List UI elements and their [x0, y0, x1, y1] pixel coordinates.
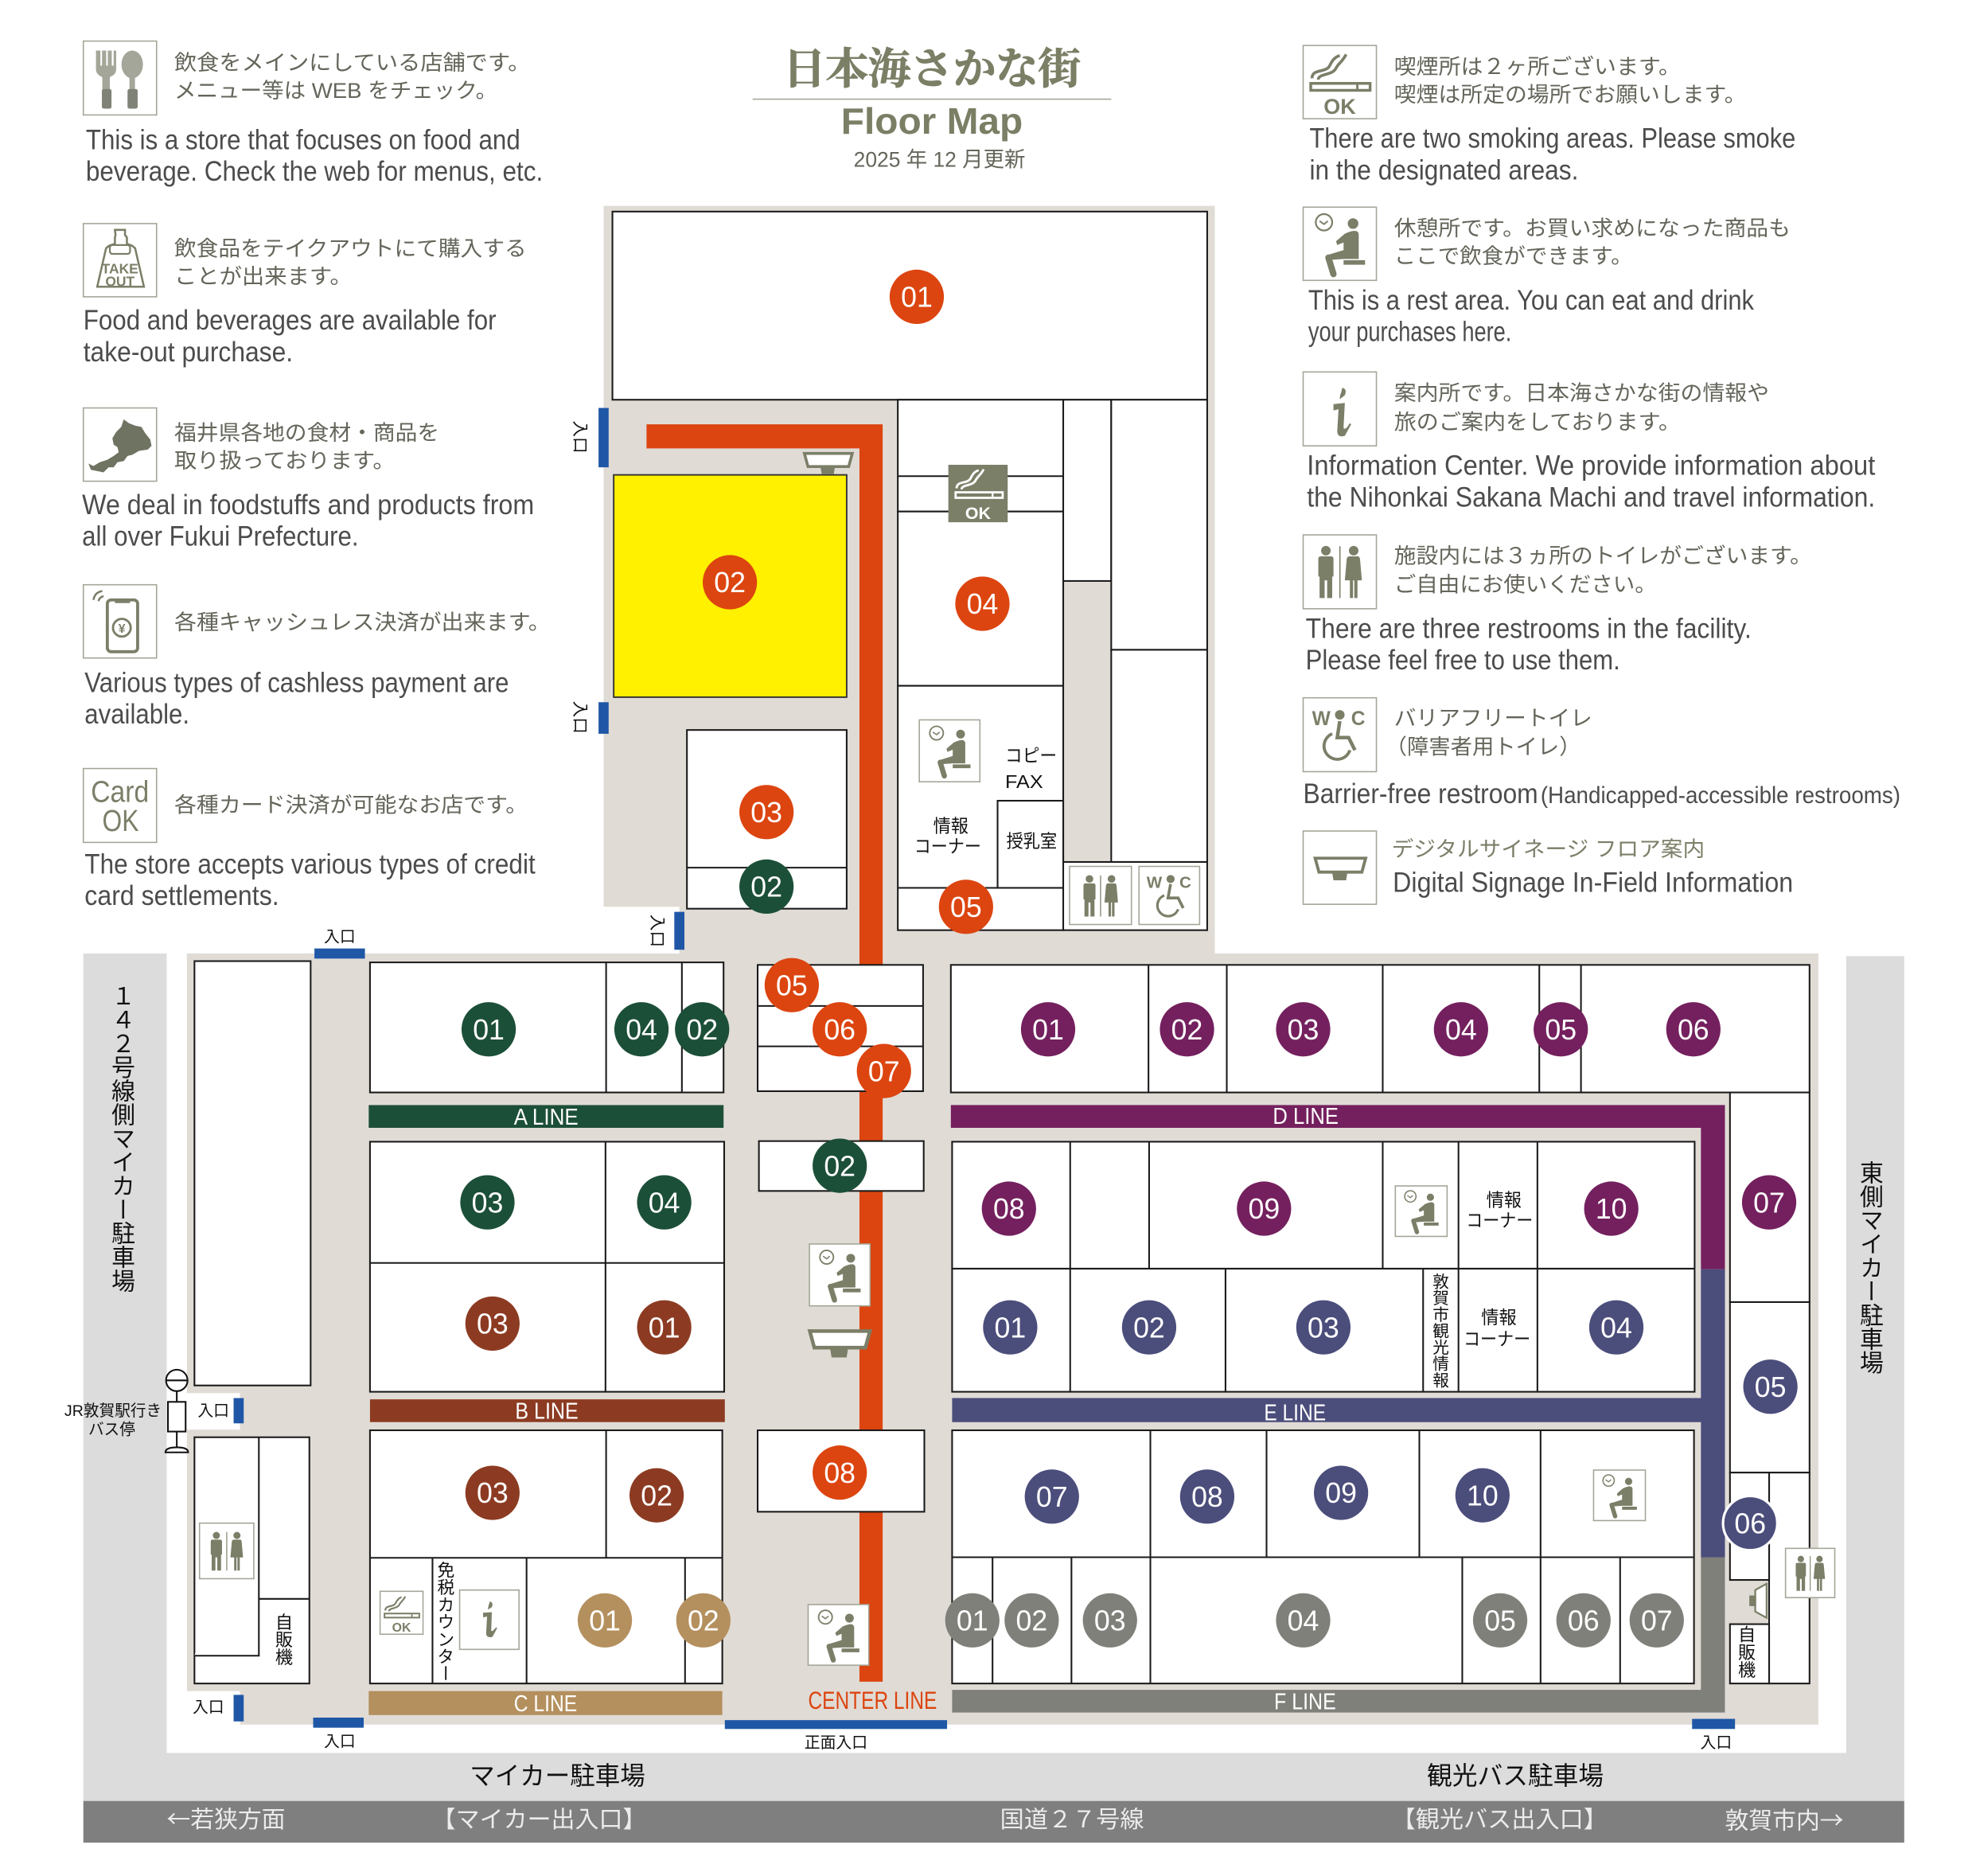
icon: take-out bag [84, 224, 157, 297]
icon: take-out bag: TAKE [102, 261, 138, 277]
text: smoking EN: in the designated areas. [1309, 154, 1578, 185]
title: Japanese: 日本海さかな街 [783, 35, 1081, 96]
number markers: F line grey [945, 1593, 1684, 1648]
bar: E line [952, 1270, 1725, 1557]
icon: smoking OK [1304, 45, 1377, 119]
text: information EN [1307, 450, 1876, 513]
bar: D line [951, 1104, 1725, 1270]
number markers: D line purple: 07 [1753, 1187, 1785, 1219]
text: Fukui JP [174, 421, 439, 473]
text: cashless EN: Various types of cashless payment are [84, 668, 509, 699]
icon: wheelchair WC: W [1312, 708, 1331, 730]
labels: copy and fax: FAX [1005, 771, 1043, 792]
label: nursing room: 授乳室 [1007, 831, 1057, 852]
legend: information [1304, 372, 1876, 513]
bar: B line: B LINE [515, 1399, 579, 1425]
number markers: upper orange: 03 [750, 797, 782, 829]
legend: rest area [1304, 207, 1791, 347]
label: info corner D: 情報 [1487, 1189, 1522, 1210]
legend: food and drink [84, 41, 543, 187]
icon: rest area [1304, 207, 1377, 280]
icon: restroom east [1786, 1548, 1835, 1597]
building floor [187, 206, 1818, 1725]
icon: wheelchair upper: W [1147, 874, 1163, 892]
labels: copy and fax: コピー [1005, 745, 1057, 766]
shop: yellow 02 [614, 475, 847, 697]
shop: center green 02 [759, 1141, 924, 1191]
road labels [166, 1801, 1844, 1836]
number markers: D line purple: 06 [1678, 1014, 1709, 1046]
text: smoking EN [1309, 123, 1795, 185]
number markers: D line purple: 10 [1596, 1193, 1627, 1225]
label: info corner E: 情報 [1481, 1307, 1517, 1328]
icon: restrooms [1304, 535, 1377, 609]
text: smoking EN: There are two smoking areas. Please smoke [1309, 123, 1795, 154]
icon: Fukui prefecture map [84, 408, 157, 482]
shops: service column [898, 400, 1063, 930]
number markers: D line purple: 08 [993, 1193, 1025, 1225]
road labels: 【マイカー出入口】 [432, 1801, 646, 1835]
label: info corner upper: 情報 [933, 816, 969, 837]
number markers: C line tan: 02 [688, 1605, 719, 1637]
number markers: A line green: 04 [626, 1014, 657, 1046]
number markers: F line grey: 04 [1288, 1605, 1319, 1637]
text: cashless EN: available. [84, 699, 189, 730]
D line shops [951, 965, 1810, 1093]
text: take-out EN: Food and beverages are available for [84, 305, 497, 336]
entrances: upper wing [598, 408, 684, 950]
legend: Fukui products [82, 408, 534, 552]
text: take-out EN [84, 305, 497, 368]
text: cashless JP: 各種キャッシュレス決済が出来ます。 [174, 610, 551, 634]
icon: rest area E line [1593, 1470, 1646, 1520]
surrounding labels [107, 984, 1884, 1836]
number markers: A line green: 02 [686, 1014, 718, 1046]
labels: entrances: 入口 [324, 1733, 356, 1750]
text: barrier-free EN: (Handicapped-accessible restrooms) [1541, 782, 1900, 809]
shops: D and E block [952, 1141, 1694, 1392]
label: vending east: 自販機 [1736, 1625, 1756, 1679]
label: vending west: 自販機 [273, 1613, 293, 1666]
labels: entrances: 入口 [324, 929, 356, 946]
icon: smoking on dark tile [949, 465, 1008, 523]
number markers: B line brown: 03 [477, 1309, 509, 1340]
icon: smartphone payment: ¥ [119, 622, 126, 636]
text: restrooms JP [1394, 544, 1812, 596]
legend: restrooms [1304, 535, 1812, 676]
labels: upper entrances: 入口 [571, 420, 589, 454]
number markers: F line grey: 02 [1016, 1605, 1047, 1637]
text: cashless EN [84, 668, 509, 730]
text: information JP: 旅のご案内をしております。 [1394, 411, 1681, 435]
number markers: upper orange: 04 [967, 588, 998, 620]
text: barrier-free JP: バリアフリートイレ [1394, 707, 1592, 731]
number markers: D line purple: 02 [1171, 1014, 1202, 1046]
label: Tsuruga tourism info: 敦賀市観光情報 [1430, 1273, 1449, 1388]
icon: rest area D line [1395, 1186, 1447, 1236]
number markers: upper orange: 05 [950, 891, 982, 923]
number markers: E line blue: 01 [995, 1312, 1026, 1344]
labels: entrances: 正面入口 [805, 1734, 867, 1752]
text: smoking JP: 喫煙所は２ヶ所ございます。 [1394, 55, 1681, 79]
bar: A line [368, 1105, 723, 1130]
text: card EN: The store accepts various types of credit [84, 848, 536, 879]
text: restrooms EN: There are three restrooms in the facility. [1306, 613, 1752, 644]
lines A B C shops [368, 962, 725, 1717]
labels: upper entrances [571, 420, 666, 947]
icon: rest area upper [919, 720, 980, 782]
icon: signage center [810, 1331, 870, 1357]
road labels: ←若狭方面 [166, 1801, 286, 1835]
center aisle [758, 965, 937, 1714]
shop: 03 with green 02 [687, 730, 847, 909]
icon: wheelchair WC [1304, 698, 1377, 772]
number markers: A line green: 02 [824, 1150, 856, 1182]
number markers: E line blue: 10 [1467, 1480, 1499, 1511]
text: information EN: Information Center. We provide information about [1307, 450, 1876, 482]
icon: wheelchair WC: C [1351, 708, 1366, 730]
number markers: C line tan [578, 1593, 731, 1648]
text: barrier-free JP [1386, 707, 1592, 759]
entrances: west and south [234, 949, 1735, 1729]
label: info corner D [1466, 1189, 1533, 1231]
number markers: F line grey: 03 [1094, 1605, 1126, 1637]
legend: take out [84, 224, 527, 368]
text: card EN: card settlements. [84, 880, 279, 911]
label: tour bus parking: 観光バス駐車場 [1427, 1761, 1604, 1790]
text: Fukui EN: all over Fukui Prefecture. [82, 521, 359, 552]
text: signage EN: Digital Signage In-Field Information [1393, 867, 1793, 898]
shops: A and B block [370, 1141, 724, 1392]
shops: B and C block [370, 1430, 723, 1683]
subtitle: Floor Map: Floor Map [841, 100, 1023, 142]
legend: smoking [1304, 45, 1795, 185]
icon: fork and spoon [84, 41, 157, 115]
number markers: upper orange: 07 [868, 1055, 900, 1087]
number markers: F line grey: 07 [1641, 1605, 1673, 1637]
number markers: upper orange [703, 270, 1010, 1500]
label: east parking: 東側マイカー駐車場 [1856, 1160, 1884, 1375]
number markers: E line blue: 09 [1325, 1477, 1357, 1509]
shop: long west building [194, 961, 310, 1386]
icon: rest area center [809, 1244, 870, 1306]
legend: card [84, 769, 536, 911]
text: rest JP: ここで飲食ができます。 [1394, 244, 1633, 268]
bar: E line: E LINE [1264, 1400, 1326, 1426]
label: center line: CENTER LINE [809, 1686, 937, 1714]
text: rest JP [1394, 216, 1791, 268]
text: card JP: 各種カード決済が可能なお店です。 [174, 793, 528, 817]
label: route 142 parking: １４２号線側マイカー駐車場 [107, 984, 135, 1293]
shop: center 08 [758, 1430, 924, 1511]
icon: smoking C line: OK [392, 1621, 411, 1635]
text: barrier-free EN: Barrier-free restroom [1304, 778, 1538, 809]
number markers: E line blue [983, 1301, 1798, 1550]
number markers: D line purple [982, 1002, 1796, 1236]
number markers: F line grey: 06 [1568, 1605, 1600, 1637]
text: food JP: メニュー等は WEB をチェック。 [174, 79, 497, 103]
shop: south-west building [194, 1437, 310, 1683]
labels: copy and fax [1005, 745, 1057, 792]
text: card EN [84, 848, 536, 911]
legend: digital signage [1304, 831, 1793, 904]
number markers: D line purple: 09 [1248, 1193, 1280, 1225]
icon: information i [1304, 372, 1377, 446]
number markers: D line purple: 04 [1445, 1014, 1477, 1046]
label: duty free counter: 免税カウンター [435, 1561, 455, 1682]
number markers: B line brown [466, 1297, 692, 1523]
label: info corner D: コーナー [1466, 1210, 1533, 1231]
text: food JP [174, 51, 530, 103]
number markers: D line purple: 03 [1288, 1014, 1319, 1046]
text: food EN [86, 124, 543, 187]
icon: rest area center lower [809, 1605, 869, 1665]
label: info corner upper: コーナー [914, 836, 981, 856]
label: car parking: マイカー駐車場 [470, 1761, 645, 1790]
text: rest EN: This is a rest area. You can eat and drink [1308, 285, 1754, 316]
labels: entrances: 入口 [1701, 1734, 1732, 1752]
shops: E and F block [952, 1430, 1694, 1683]
number markers: C line tan: 01 [589, 1605, 621, 1637]
number markers: E line blue: 06 [1734, 1507, 1766, 1539]
bar: F line: F LINE [1274, 1690, 1336, 1715]
number markers: F line grey: 05 [1484, 1605, 1516, 1637]
text: Fukui JP: 取り扱っております。 [174, 449, 396, 473]
number markers: A line green: 02 [750, 872, 782, 903]
number markers: E line blue: 02 [1133, 1312, 1165, 1344]
text: smoking JP [1394, 55, 1746, 107]
bar: B line [370, 1399, 725, 1425]
A line shops [370, 962, 723, 1093]
text: information EN: the Nihonkai Sakana Machi and travel information. [1307, 482, 1875, 513]
number markers: E line blue: 05 [1755, 1371, 1786, 1403]
icon: Card OK [84, 769, 157, 842]
road labels: 敦賀市内→ [1725, 1803, 1844, 1836]
number markers: E line blue: 08 [1191, 1481, 1223, 1513]
text: restrooms EN: Please feel free to use them. [1306, 645, 1620, 676]
icon: signage east [1750, 1584, 1767, 1618]
number markers: upper orange: 05 [776, 969, 808, 1001]
number markers: upper orange: 08 [824, 1457, 856, 1489]
labels: upper entrances: 入口 [571, 701, 589, 734]
label: bus stop [64, 1402, 162, 1439]
title block [753, 35, 1111, 171]
number markers: A line green [460, 860, 867, 1230]
number markers: E line blue: 04 [1600, 1312, 1632, 1344]
label: bus stop: バス停 [88, 1422, 135, 1439]
icon: restroom west [200, 1523, 254, 1578]
bar: D line: D LINE [1273, 1104, 1339, 1129]
icon: smoking on dark tile: OK [965, 504, 992, 523]
number markers: F line grey: 01 [957, 1605, 988, 1637]
icon: smoking OK: OK [1323, 95, 1356, 119]
text: take-out JP: ことが出来ます。 [174, 264, 353, 288]
number markers: upper orange: 02 [714, 567, 746, 599]
text: restrooms JP: 施設内には３ヵ所のトイレがございます。 [1394, 544, 1812, 568]
text: information JP [1394, 381, 1769, 435]
bar: F line [952, 1557, 1725, 1715]
map background: surrounding parking area [84, 954, 1904, 1801]
legend: cashless [84, 585, 551, 730]
text: restrooms JP: ご自由にお使いください。 [1394, 572, 1657, 596]
labels: entrances [193, 929, 1732, 1752]
text: information JP: 案内所です。日本海さかな街の情報や [1394, 381, 1769, 405]
number markers: A line green: 04 [649, 1187, 680, 1219]
number markers: D line purple: 05 [1545, 1014, 1577, 1046]
icon: restroom upper [1070, 867, 1132, 925]
number markers: E line blue: 03 [1308, 1312, 1339, 1344]
text: food EN: beverage. Check the web for menus, etc. [86, 156, 543, 187]
text: take-out JP [174, 236, 527, 288]
number markers: B line brown: 02 [641, 1480, 672, 1511]
text: take-out JP: 飲食品をテイクアウトにて購入する [174, 236, 527, 260]
label: info corner E: コーナー [1464, 1328, 1530, 1349]
shops: east column [1730, 1093, 1810, 1683]
road labels: 国道２７号線 [1000, 1801, 1144, 1835]
shops: east column [1063, 400, 1207, 930]
number markers: A line green: 03 [472, 1187, 503, 1219]
road band [84, 1801, 1904, 1843]
bar: C line: C LINE [514, 1691, 577, 1717]
label: info corner upper [914, 816, 981, 856]
text: barrier-free JP: （障害者用トイレ） [1386, 735, 1581, 759]
text: food JP: 飲食をメインにしている店舗です。 [174, 51, 530, 75]
legend: barrier-free restroom [1304, 698, 1900, 809]
text: rest EN: your purchases here. [1308, 316, 1511, 347]
text: rest EN [1308, 285, 1754, 347]
shops: center 05 06 07 [758, 965, 923, 1091]
labels: entrances: 入口 [197, 1402, 229, 1420]
labels: upper entrances: 入口 [648, 915, 666, 947]
number markers: D line purple: 01 [1032, 1014, 1064, 1046]
text: Fukui EN: We deal in foodstuffs and products from [82, 489, 534, 521]
text: rest JP: 休憩所です。お買い求めになった商品も [1394, 216, 1791, 240]
upper wing shops [571, 212, 1207, 950]
icon: signage upper [805, 454, 852, 474]
west shops [64, 929, 1735, 1752]
icon: bus stop [166, 1370, 188, 1453]
text: take-out EN: take-out purchase. [84, 337, 293, 368]
text: barrier-free EN [1304, 778, 1900, 809]
number markers: B line brown: 01 [649, 1312, 680, 1344]
icon: wheelchair upper: C [1179, 874, 1191, 892]
bar: C line [368, 1691, 723, 1717]
icon: smoking C line [380, 1591, 423, 1635]
icon: wheelchair upper [1139, 867, 1199, 925]
text: Fukui JP: 福井県各地の食材・商品を [174, 421, 439, 445]
number markers: upper orange: 01 [901, 282, 933, 314]
text: food EN: This is a store that focuses on food and [86, 124, 520, 155]
label: bus stop: JR敦賀駅行き [64, 1402, 162, 1420]
icon: take-out bag: OUT [105, 273, 134, 289]
text: Fukui EN [82, 489, 534, 552]
text: restrooms EN [1306, 613, 1752, 676]
text: smoking JP: 喫煙は所定の場所でお願いします。 [1394, 83, 1746, 107]
icon: digital signage [1304, 831, 1377, 904]
text: signage JP: デジタルサイネージ フロア案内 [1392, 837, 1705, 861]
number markers: E line blue: 07 [1036, 1481, 1068, 1513]
labels: entrances: 入口 [193, 1699, 224, 1717]
lines D E F shops [951, 965, 1835, 1715]
road labels: 【観光バス出入口】 [1392, 1801, 1608, 1835]
number markers: upper orange: 06 [824, 1014, 856, 1046]
shop: top 01 [613, 212, 1207, 400]
icon: Card OK: Card [91, 776, 149, 809]
label: info corner E [1464, 1307, 1530, 1349]
updated date: 2025 年 12 月更新 [854, 147, 1025, 171]
number markers: B line brown: 03 [477, 1477, 509, 1509]
bar: A line: A LINE [514, 1105, 579, 1130]
icon: information C line [460, 1590, 519, 1649]
number markers: A line green: 01 [473, 1014, 505, 1046]
center line route [646, 424, 883, 1682]
icon: smartphone payment [84, 585, 157, 658]
icon: Card OK: OK [103, 805, 139, 838]
